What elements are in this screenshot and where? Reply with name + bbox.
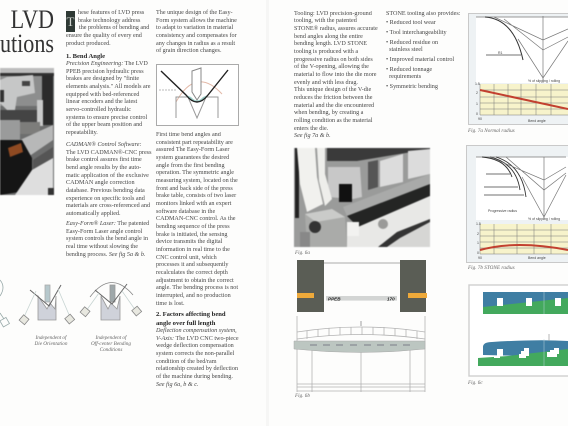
- text: column 3 tooling paragraph: material and the die encountered: [294, 103, 374, 109]
- chart labels: [476, 209, 560, 260]
- text: column 2 repeatability paragraph: CADMAN-CNC control. As the: [156, 216, 236, 222]
- text: column 3 tooling paragraph: when bending, by creating a: [294, 110, 363, 116]
- text: column 3 tooling paragraph: tooling is produced with a: [294, 49, 358, 55]
- PPEB label bar: [326, 296, 397, 301]
- bullet list: • Reduced tool wear: [386, 20, 436, 26]
- caption: off-center bending: Conditions: [100, 347, 122, 353]
- text: column 2 repeatability paragraph: time is lost.: [156, 301, 184, 307]
- caption: Fig 6a: Fig. 6a: [295, 250, 310, 256]
- progressive curves: [476, 157, 566, 220]
- chart labels: 2: [477, 232, 479, 236]
- text: column 2 repeatability paragraph: device transmits the digital: [156, 239, 222, 245]
- diagram: partial left: [0, 280, 9, 327]
- intro paragraph: the problems of bending and: [79, 25, 149, 31]
- paragraph: deflection compensation: system corrects the non-parallel: [156, 351, 234, 357]
- bullet list: [386, 20, 454, 90]
- left block: [297, 260, 324, 312]
- text: column 2 repeatability paragraph: interrupted, and no production: [156, 293, 231, 299]
- text: column 2 repeatability paragraph: assured The Easy-Form Laser: [156, 147, 229, 153]
- text: column 1 intro and bend angle: [66, 10, 152, 258]
- chart labels: R1: [498, 51, 503, 55]
- text: column 2 repeatability paragraph: First time bend angles and: [156, 132, 221, 138]
- page fold: [266, 0, 269, 426]
- paragraph: CADMAN control software: automatically applied.: [66, 211, 121, 217]
- text: column 2 top paragraph: any changes in radius as a result: [156, 41, 235, 47]
- text: STONE tooling benefits list: [386, 11, 460, 90]
- title: [0, 5, 54, 58]
- paragraph: deflection compensation: wedge deflection compensation: [156, 343, 234, 349]
- caption: Fig 7a: Fig. 7a Normal radius: [468, 128, 515, 134]
- text: column 2 top paragraph: [156, 10, 237, 54]
- text: column 2 repeatability paragraph: measuring system, located on the: [156, 178, 238, 184]
- text: column 2 repeatability paragraph: operation. The symmetric angle: [156, 170, 234, 176]
- heading: factors affecting bend angle: [156, 311, 226, 327]
- caption: die orientation: [34, 335, 68, 347]
- right block: [400, 260, 427, 312]
- chart labels: 0: [476, 112, 478, 116]
- intro paragraph: brake technology address: [78, 18, 140, 24]
- paragraph: CADMAN control software: experience on specific tools and: [66, 196, 145, 202]
- text: column 2 repeatability paragraph: CNC control unit, which: [156, 255, 217, 261]
- grid: [480, 224, 568, 254]
- text: column 2 repeatability paragraph: recalculates the correct depth: [156, 270, 228, 276]
- paragraph: Easy-Form laser: Easy-Form Laser angle control: [66, 229, 142, 235]
- chart labels: 2: [476, 91, 478, 95]
- paragraph: Easy-Form laser: bending process. See fig 5a & b.: [66, 252, 145, 258]
- paragraph: deflection compensation: See fig 6a, b & c.: [156, 382, 198, 388]
- curve and lines: [476, 16, 568, 83]
- paragraph: deflection compensation: relationship created by deflection: [156, 366, 238, 372]
- text: column 2 repeatability paragraph: information in real time to the: [156, 247, 230, 253]
- text: column 2 repeatability paragraph: processes it and subsequently: [156, 262, 228, 268]
- text: column 2 repeatability paragraph: consistent part repeatability are: [156, 140, 233, 146]
- intro paragraph: [78, 10, 150, 31]
- chart labels: % of slipping / rolling: [528, 79, 560, 83]
- top rail: [324, 262, 400, 264]
- intro paragraph end: [66, 32, 142, 47]
- paragraph: CADMAN control software: The LVD CADMAN®-CNC press: [66, 150, 151, 156]
- chart labels: Bend angle: [528, 119, 546, 123]
- paragraph: CADMAN control software: brake control assures first time: [66, 157, 142, 163]
- list heading: STONE tooling also provides:: [386, 11, 460, 17]
- text: column 2 repeatability paragraph: brake table, consists of two laser: [156, 193, 236, 199]
- heading: factors affecting bend angle: angle over full length: [156, 320, 215, 327]
- text: column 3 tooling paragraph: tooling, with the patented: [294, 18, 357, 24]
- caption: die orientation: Die Orientation: [34, 341, 68, 347]
- deformed wedge: [478, 334, 568, 366]
- paragraph: CADMAN control software: CADMAN® Control Software:: [66, 142, 142, 148]
- diagrams: bending independence: [0, 280, 142, 328]
- paragraph: precision engineering: brakes are designed by "finite: [66, 76, 139, 82]
- paragraph: CADMAN control software: bend angle results by the auto-: [66, 165, 141, 171]
- paragraph: Easy-Form laser: Easy-Form® Laser: The patented: [66, 221, 149, 227]
- text: column 2 repeatability paragraph: front and back side of the press: [156, 186, 233, 192]
- paragraph: precision engineering: [66, 61, 151, 136]
- paragraph: deflection compensation: [156, 328, 239, 388]
- intro paragraph end: product produced.: [66, 41, 111, 47]
- grid: [480, 84, 568, 115]
- paragraph: precision engineering: servo-controlled hydraulic: [66, 107, 131, 113]
- paragraph: precision engineering: Precision Engineering: The LVD: [66, 61, 148, 67]
- chart labels: Bend angle: [528, 256, 546, 260]
- chart labels: 0: [477, 251, 479, 255]
- bullet list: • Reduced tonnage: [386, 67, 432, 73]
- text: column 3 tooling paragraph: enters the die.: [294, 126, 328, 132]
- heading: factors affecting bend angle: 2. Factors affecting bend: [156, 311, 226, 318]
- intro paragraph end: ensure the quality of every end: [66, 33, 142, 39]
- caption: off-center bending: Independent of: [96, 335, 126, 341]
- intro paragraph: hese features of LVD press: [78, 10, 144, 16]
- photo: tooling close-up (Fig. 6a): [294, 147, 431, 248]
- photo: press brake machine: [0, 68, 55, 196]
- paragraph: CADMAN control software: database. Previous bending data: [66, 188, 145, 194]
- title: utions: [0, 29, 54, 58]
- text: column 2 top paragraph: The unique design of the Easy-: [156, 10, 233, 16]
- chart labels: 1.5: [475, 82, 480, 86]
- text: column 2 repeatability paragraph: system guarantees the desired: [156, 155, 229, 161]
- diagram: laser angle measuring in V-die: [156, 64, 239, 126]
- bullet list: • Reduced residue on: [386, 40, 438, 46]
- paragraph: precision engineering: elements analysis." All models are: [66, 84, 151, 90]
- paragraph: CADMAN control software: CADMAN angle correction: [66, 180, 135, 186]
- diagram: off-center bending: [80, 282, 142, 320]
- text: column 2 repeatability paragraph: bending sequence of the press: [156, 224, 230, 230]
- text: column 3 tooling paragraph: of the V-opening, allowing the: [294, 64, 369, 70]
- diagram: deflection beam (Fig. 6b): [294, 316, 426, 392]
- drop cap T: [66, 11, 75, 32]
- paragraph: Easy-Form laser: system controls the bend angle in: [66, 236, 148, 242]
- text: column 2 repeatability paragraph: angle from the first bending: [156, 163, 225, 169]
- text: column 2 top paragraph: of grain direction changes.: [156, 48, 221, 54]
- text: column 3 tooling paragraph: bending length. LVD STONE: [294, 41, 367, 47]
- diagram: PPEB 170 cross section: [297, 260, 427, 312]
- text: column 3 tooling paragraph: material to flow into the die more: [294, 72, 377, 78]
- text: column 2 repeatability paragraph: angle. The bending process is not: [156, 285, 238, 291]
- paragraph: precision engineering: PPEB precision hydraulic press: [66, 69, 144, 75]
- paragraph: CADMAN control software: [66, 142, 152, 217]
- paragraph: deflection compensation: Deflection compensation system,: [156, 328, 237, 334]
- chart labels: 1: [476, 102, 478, 106]
- chart: Fig. 7b STONE radius: [466, 145, 568, 263]
- text: column 2 repeatability paragraph: software database in the: [156, 209, 215, 215]
- text: column 3 tooling paragraph: progressive radius on both sides: [294, 57, 373, 63]
- caption: Fig 7b: Fig. 7b STONE radius: [468, 264, 515, 270]
- paragraph: Easy-Form laser: [66, 220, 150, 258]
- text: column 3 tooling paragraph: STONE® radius, assures accurate: [294, 26, 378, 32]
- paragraph: precision engineering: of the upper beam position and: [66, 122, 142, 128]
- chart labels: Progressive radius: [488, 209, 517, 213]
- paragraph: precision engineering: repeatability.: [66, 130, 98, 136]
- paragraph: deflection compensation: V-Axis: The LVD CNC two-piece: [156, 336, 239, 342]
- paragraph: precision engineering: equipped with bed-referenced: [66, 92, 139, 98]
- text: column 2 repeatability paragraph: [156, 132, 238, 307]
- paragraph: precision engineering: linear encoders and the latest: [66, 99, 137, 105]
- text: column 2 repeatability paragraph: monitors linked with an expert: [156, 201, 231, 207]
- caption: off-center bending: [91, 335, 131, 353]
- diagram: wedge system (Fig. 6c): [468, 284, 568, 377]
- text: column 3 tooling paragraph: This unique design of the V-die: [294, 87, 371, 93]
- drop cap T: T: [67, 14, 74, 29]
- top wedge: [483, 292, 568, 314]
- bullet list: • Improved material control: [386, 57, 454, 63]
- text: column 3 tooling paragraph: bend angles along the entire: [294, 34, 363, 40]
- chart labels: 90: [478, 117, 482, 121]
- bullet list: • Symmetric bending: [386, 84, 438, 90]
- diagram: die orientation: [19, 285, 75, 325]
- caption: off-center bending: Off-center Bending: [91, 341, 131, 347]
- chart labels: 90: [478, 256, 482, 260]
- text: column 3 tooling paragraph: [294, 10, 378, 139]
- heading: bend angle: 1. Bend Angle: [66, 53, 105, 60]
- caption: Fig 6b: Fig. 6b: [295, 393, 310, 399]
- chart labels: [475, 51, 560, 123]
- caption: Fig 6c: Fig. 6c: [468, 380, 483, 386]
- bullet list: • Tool interchangeability: [386, 30, 447, 36]
- paragraph: CADMAN control software: materials are cross-referenced and: [66, 203, 150, 209]
- caption: die orientation: Independent of: [36, 335, 66, 341]
- text: column 3 tooling paragraph: reduces the friction between the: [294, 95, 372, 101]
- chart labels: 1.5: [476, 222, 481, 226]
- paragraph: precision engineering: systems to ensure precise control: [66, 115, 147, 121]
- text: column 2 top paragraph: Form system allows the machine: [156, 18, 237, 24]
- paragraph: deflection compensation: of the machine during bending.: [156, 374, 233, 380]
- text: column 2 repeatability paragraph: brake is initiated, the sensing: [156, 232, 227, 238]
- chart labels: 1: [477, 241, 479, 245]
- text: column 3 tooling paragraph: See fig 7a & b.: [294, 133, 331, 139]
- bullet list: requirements: [389, 74, 421, 80]
- chart labels: % of slipping / rolling: [528, 217, 560, 221]
- paragraph: deflection compensation: condition of the bed/ram: [156, 359, 217, 365]
- text: column 3 tooling paragraph: Tooling: LVD precision-ground: [294, 10, 372, 16]
- text: column 3 tooling paragraph: rolling condition as the material: [294, 118, 372, 124]
- paragraph: CADMAN control software: matic application of the exclusive: [66, 173, 149, 179]
- text: column 2 top paragraph: consistency and compensates for: [156, 33, 237, 39]
- title: LVD: [11, 5, 54, 34]
- chart: Fig. 7a normal radius: [468, 13, 568, 125]
- bullet list: stainless steel: [389, 47, 423, 53]
- text: column 2 repeatability paragraph: adjustment to obtain the correct: [156, 278, 234, 284]
- PPEB label bar: PPEB: [328, 296, 341, 301]
- text: column 3 tooling paragraph: evenly and with less drag.: [294, 80, 358, 86]
- PPEB label bar: 170: [387, 296, 395, 301]
- paragraph: Easy-Form laser: real time without slowing the: [66, 244, 138, 250]
- text: column 2 top paragraph: to adapt to variation in material: [156, 25, 233, 31]
